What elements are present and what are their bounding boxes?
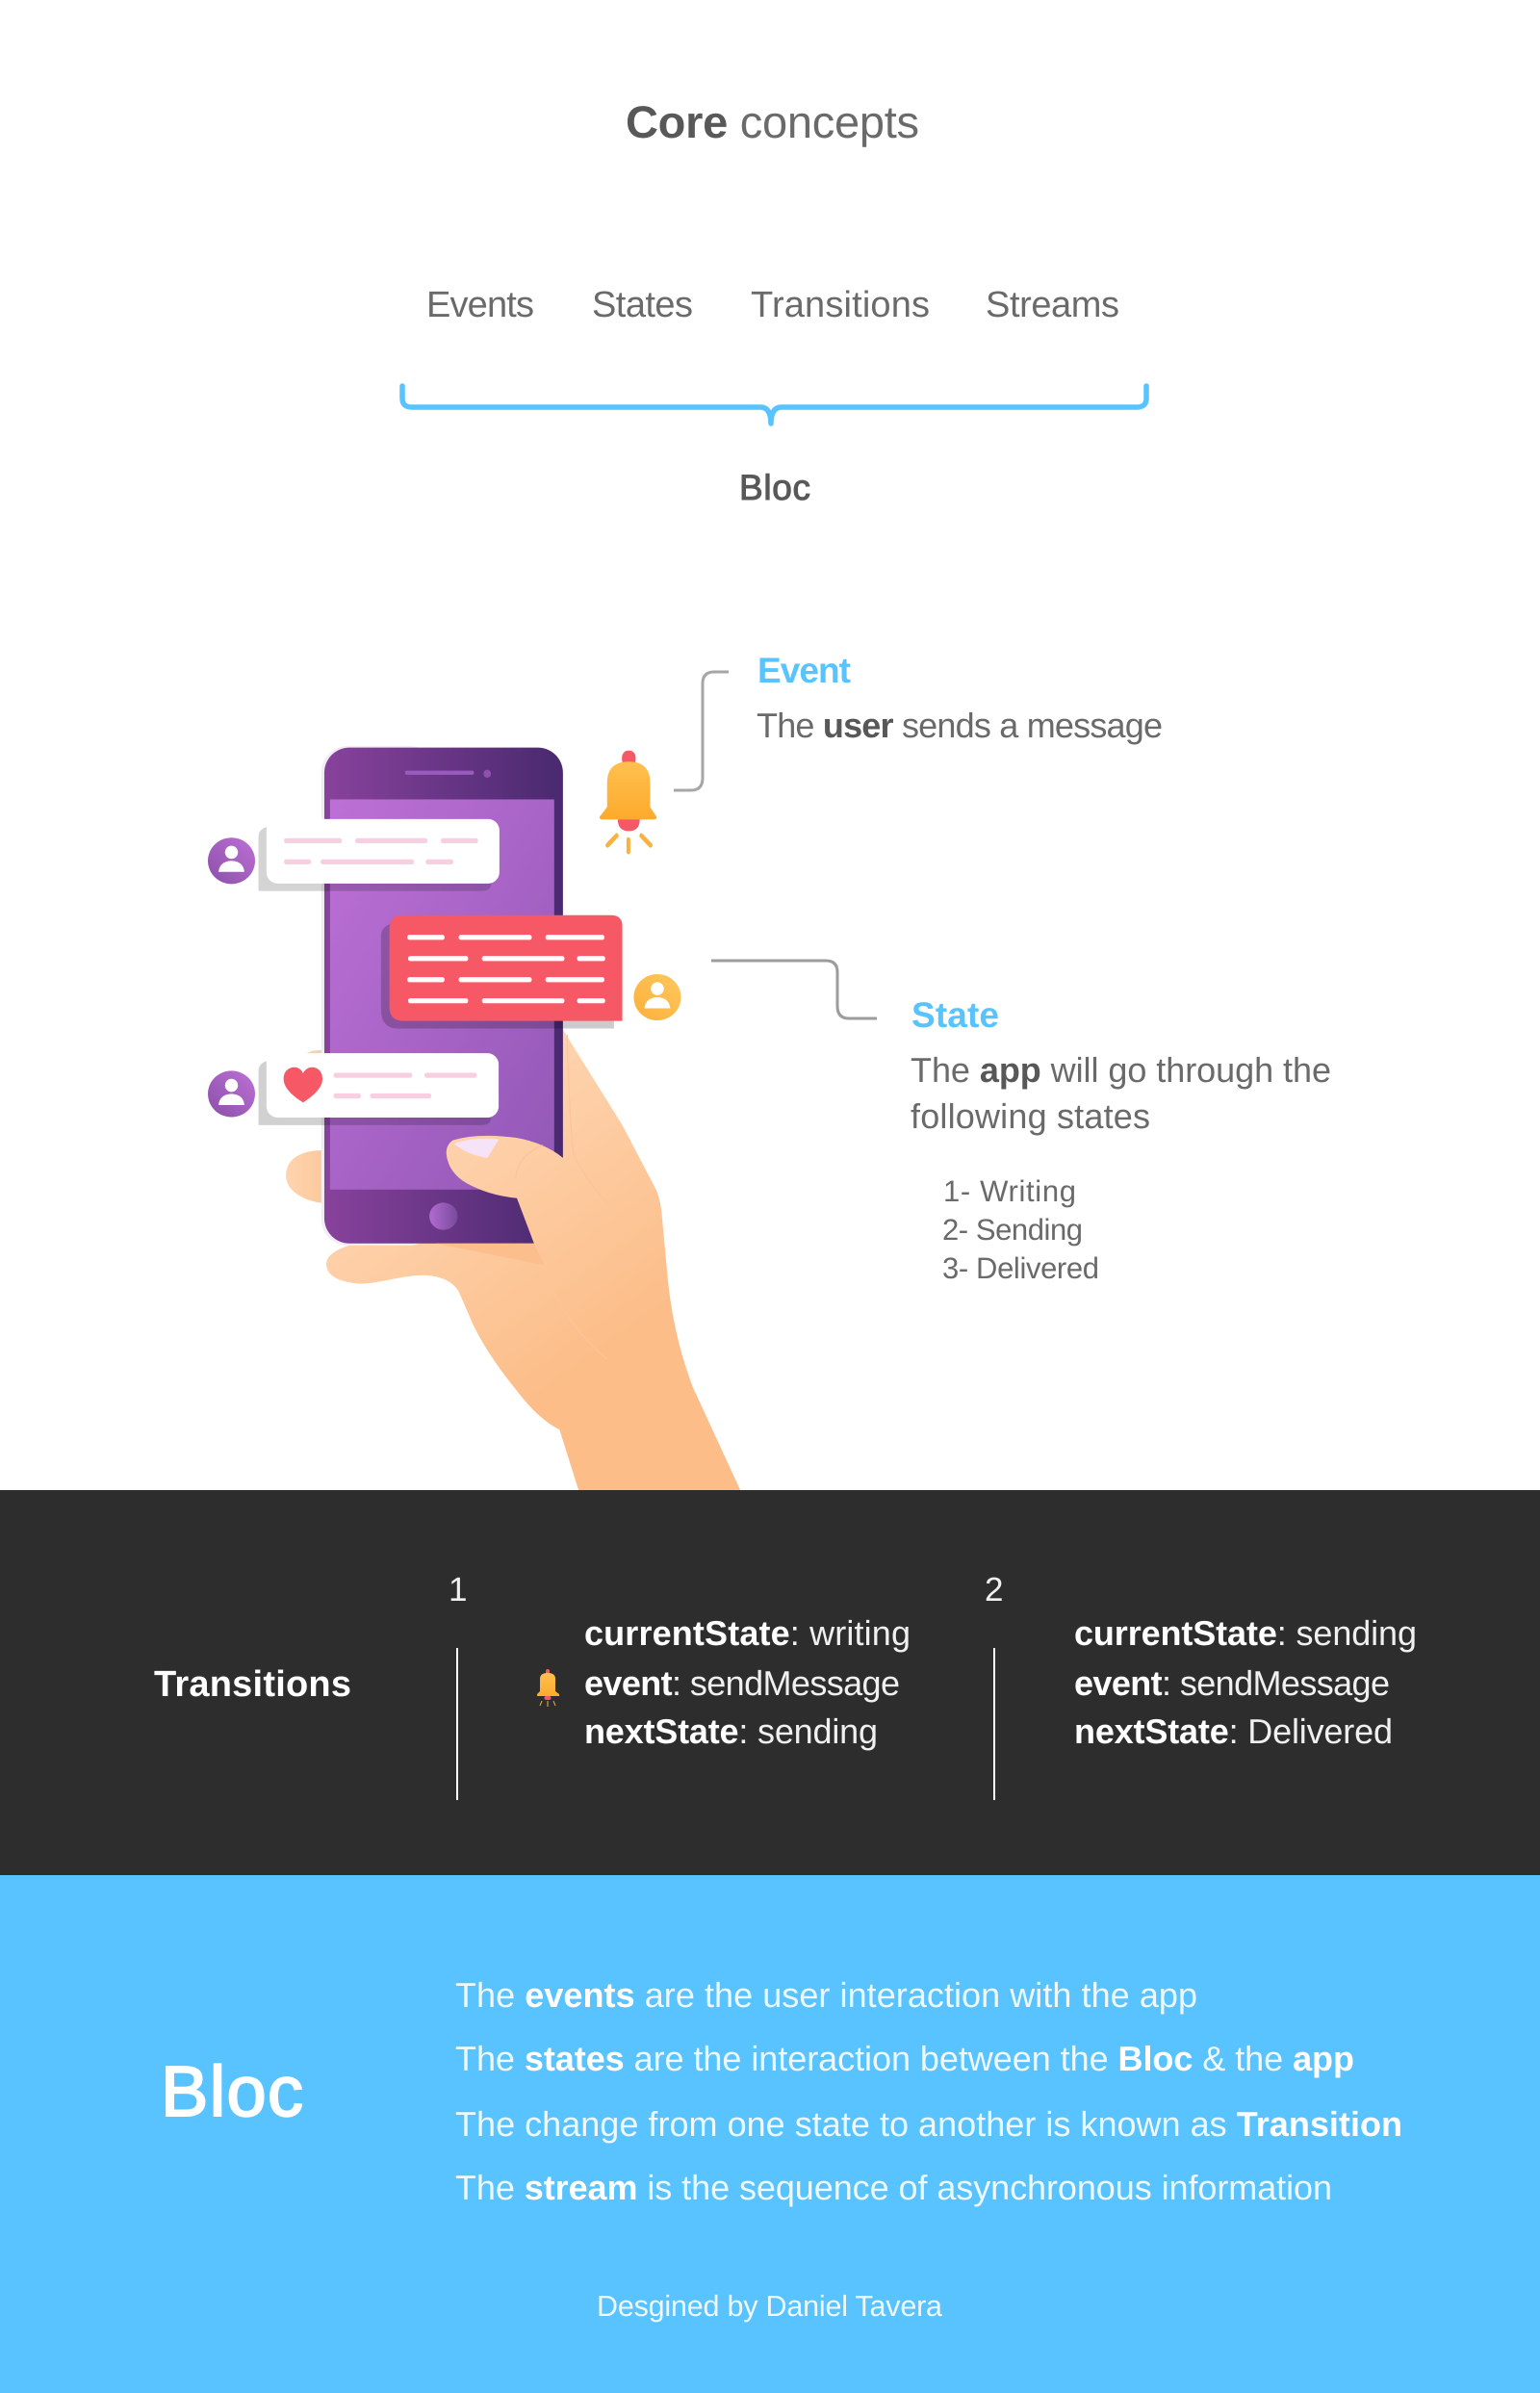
step number 2: 2 bbox=[985, 1571, 1003, 1608]
state list: 2- Sending bbox=[942, 1213, 1083, 1247]
phone screen bbox=[330, 799, 554, 1190]
concept: Transitions: Transitions bbox=[751, 285, 930, 325]
credit: Desgined by Daniel Tavera bbox=[597, 2290, 942, 2323]
step number 1: 1 bbox=[449, 1571, 467, 1608]
hand creases bbox=[516, 1035, 625, 1359]
phone speaker bbox=[405, 771, 474, 775]
divider 2 bbox=[993, 1648, 995, 1800]
transition 1: currentState: writing bbox=[584, 1613, 911, 1653]
panel: transitions bbox=[0, 1490, 1540, 1875]
title: Core concepts bbox=[626, 96, 919, 147]
summary lines: The events are the user interaction with the app bbox=[455, 1975, 1197, 2015]
event description: The user sends a message bbox=[757, 706, 1163, 745]
state list: 1- Writing bbox=[943, 1174, 1076, 1208]
palm shade under phone bbox=[436, 1244, 545, 1265]
state heading: State bbox=[911, 995, 999, 1035]
state list: 3- Delivered bbox=[942, 1251, 1099, 1285]
phone camera bbox=[483, 770, 491, 778]
state description: following states bbox=[911, 1096, 1150, 1136]
concept: Streams: Streams bbox=[986, 285, 1119, 325]
phone bbox=[321, 746, 563, 1246]
state list bbox=[942, 1174, 1099, 1285]
transition 2: event: sendMessage bbox=[1074, 1663, 1390, 1703]
transition 1: nextState: sending bbox=[584, 1711, 878, 1751]
icon: bell bbox=[600, 751, 656, 852]
summary lines: The change from one state to another is known as Transition bbox=[455, 2104, 1402, 2144]
icon: small bell bbox=[537, 1669, 559, 1707]
illustration: hand holding phone with chat bubbles bbox=[208, 746, 740, 1490]
hand bbox=[326, 1027, 740, 1490]
thumb nail bbox=[454, 1139, 499, 1158]
state description: The app will go through the bbox=[911, 1050, 1331, 1090]
thumb bbox=[447, 1136, 627, 1351]
concept list bbox=[426, 285, 1119, 325]
message bubble 1 bbox=[259, 819, 500, 891]
curly brace bbox=[402, 386, 1146, 424]
summary lines: The states are the interaction between the Bloc & the app bbox=[455, 2039, 1354, 2078]
message bubble 2 bbox=[381, 915, 623, 1028]
bloc heading: Bloc bbox=[161, 2051, 303, 2131]
connector: bell to event bbox=[674, 672, 729, 790]
summary lines bbox=[455, 1975, 1402, 2207]
concept: Events: Events bbox=[426, 285, 534, 325]
phone home button bbox=[429, 1202, 457, 1230]
avatar 1 bbox=[208, 837, 255, 884]
heart bbox=[284, 1068, 322, 1102]
summary lines: The stream is the sequence of asynchronous information bbox=[455, 2168, 1332, 2207]
connector: message to state bbox=[711, 961, 877, 1018]
divider 1 bbox=[456, 1648, 458, 1800]
avatar 3 bbox=[208, 1070, 255, 1117]
transition 1 bbox=[584, 1613, 911, 1751]
brace label: Bloc: Bloc bbox=[739, 468, 810, 507]
transition 2: currentState: sending bbox=[1074, 1613, 1417, 1653]
transitions heading: Transitions bbox=[154, 1664, 351, 1705]
transition 2: nextState: Delivered bbox=[1074, 1711, 1393, 1751]
message bubble 3 bbox=[259, 1053, 499, 1125]
panel: bloc summary bbox=[0, 1875, 1540, 2393]
state description bbox=[911, 1050, 1331, 1136]
transition 2 bbox=[1074, 1613, 1417, 1751]
event heading: Event bbox=[757, 651, 851, 690]
transition 1: event: sendMessage bbox=[584, 1663, 900, 1703]
avatar 2 bbox=[633, 974, 680, 1020]
concept: States: States bbox=[592, 285, 693, 325]
back fingers bbox=[286, 1050, 322, 1203]
